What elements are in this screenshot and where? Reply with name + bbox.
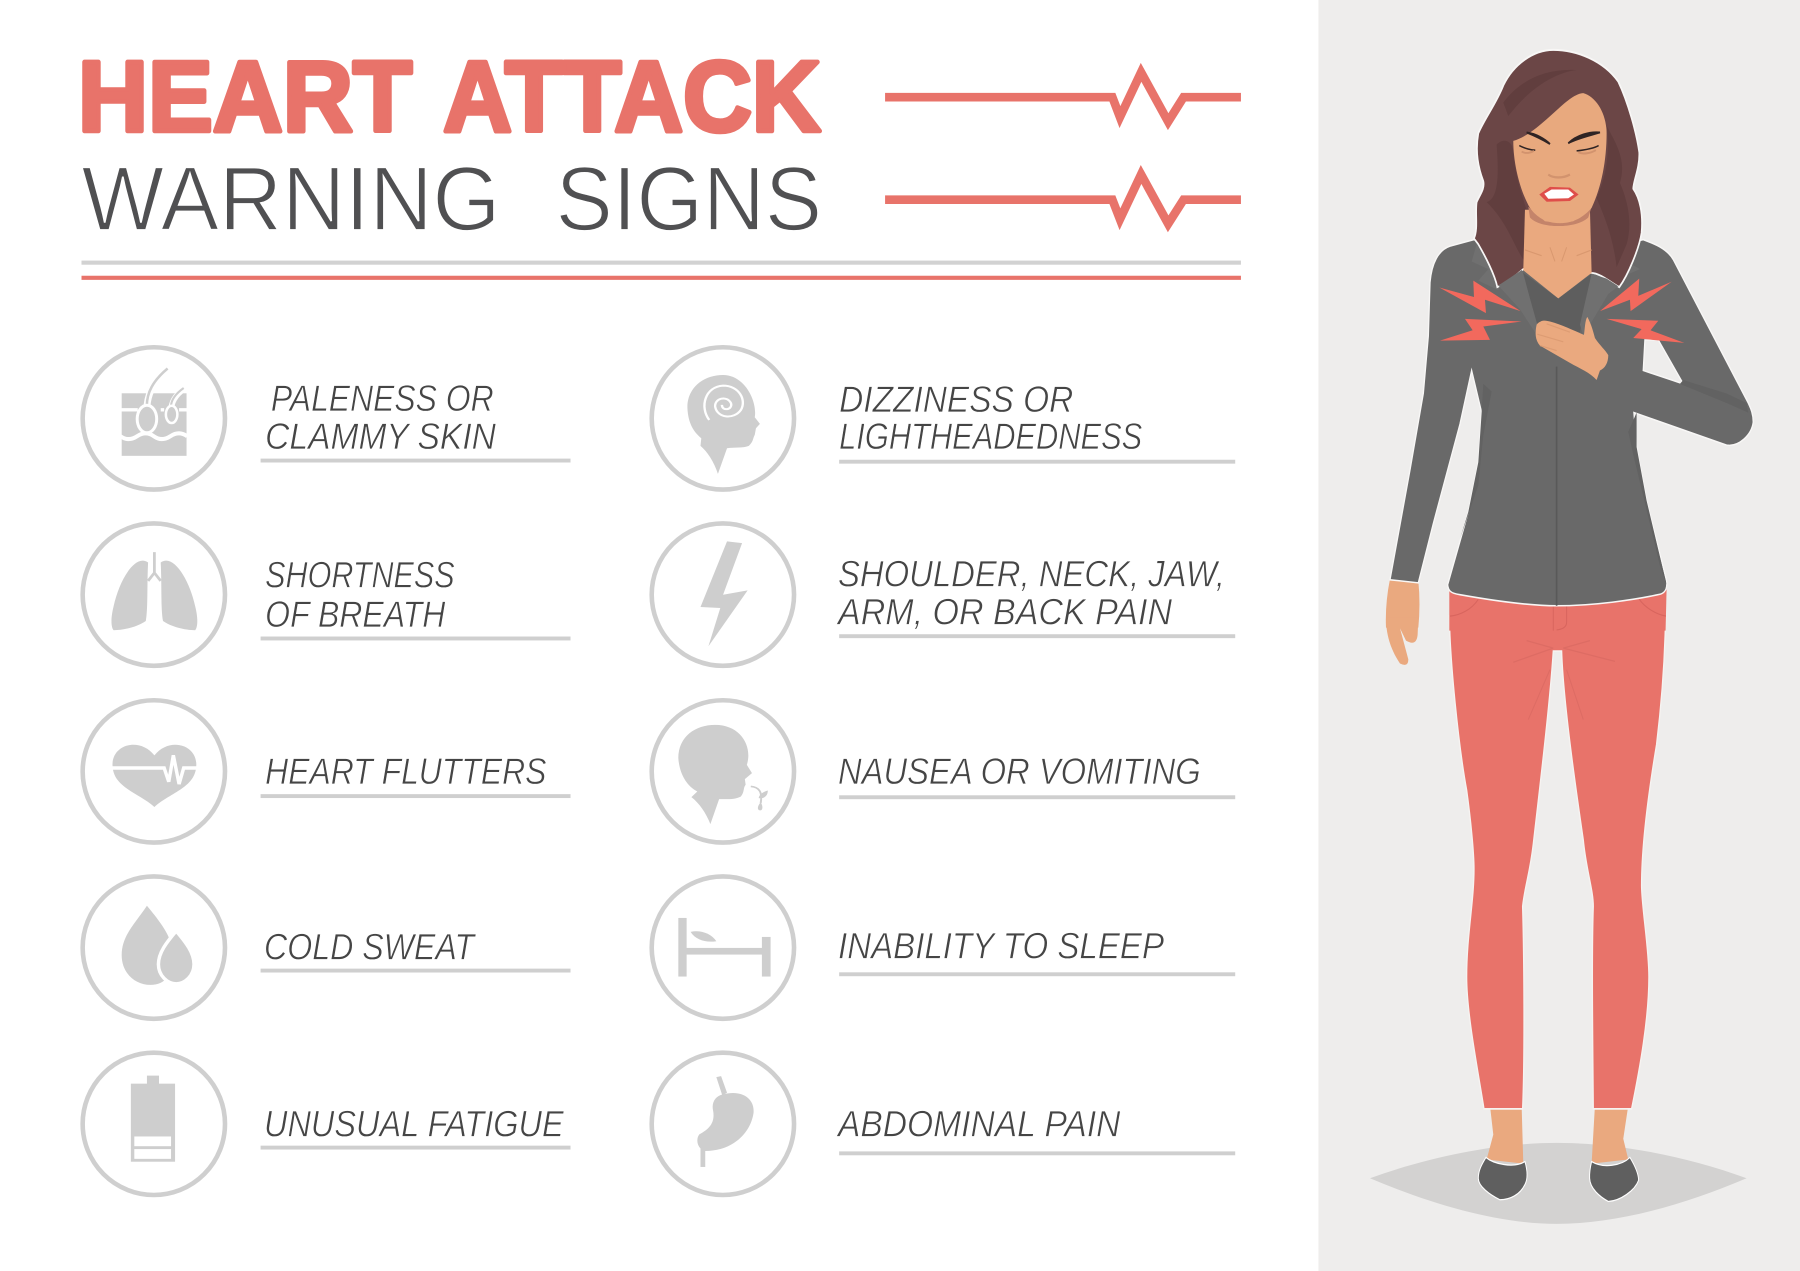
shirt bbox=[1523, 273, 1592, 332]
lapels bbox=[1498, 270, 1618, 336]
nose bbox=[1548, 175, 1570, 177]
hair bbox=[1474, 50, 1642, 287]
label: paleness or clammy skin: PALENESS OR bbox=[271, 378, 494, 419]
mouth bbox=[1539, 187, 1579, 202]
upper body bbox=[1390, 50, 1753, 631]
icon: drops bbox=[122, 906, 194, 985]
symptom: cold sweat bbox=[83, 876, 571, 1019]
title: warning signs: SIGNS bbox=[556, 149, 822, 250]
label: dizziness or: DIZZINESS OR bbox=[839, 379, 1073, 420]
label: shoulder, neck, jaw: SHOULDER, NECK, JAW, bbox=[838, 554, 1225, 595]
icon: battery bbox=[131, 1076, 175, 1162]
panel: figure background bbox=[1318, 0, 1800, 1271]
icon: lightning bolt bbox=[700, 541, 748, 646]
title: heart attack: ATTACK bbox=[443, 42, 821, 153]
label: cold sweat: COLD SWEAT bbox=[264, 927, 476, 968]
label: unusual fatigue: UNUSUAL FATIGUE bbox=[264, 1103, 564, 1144]
symptom: nausea or vomiting bbox=[652, 700, 1235, 843]
icon: heart with pulse bbox=[111, 745, 197, 807]
label: inability to sleep: INABILITY TO SLEEP bbox=[838, 926, 1164, 967]
hair strands bbox=[1487, 70, 1629, 267]
symptom: dizziness bbox=[652, 347, 1235, 490]
title: heart attack: HEART bbox=[78, 42, 412, 153]
symptom: unusual fatigue bbox=[83, 1053, 571, 1195]
lower body: legs and shoes bbox=[1449, 616, 1666, 1201]
title: heart attack bbox=[78, 42, 821, 153]
pants top bbox=[1449, 589, 1667, 631]
hand on chest bbox=[1536, 317, 1608, 380]
label: heart flutters: HEART FLUTTERS bbox=[265, 751, 547, 792]
symptom: abdominal pain bbox=[652, 1053, 1235, 1195]
jacket bbox=[1390, 240, 1753, 606]
label line 2: CLAMMY SKIN bbox=[265, 416, 496, 457]
face bbox=[1513, 93, 1607, 223]
icon: skin bbox=[121, 368, 187, 456]
icon: head vomiting bbox=[678, 725, 768, 824]
left hand bbox=[1386, 579, 1419, 665]
pain bolts bbox=[1439, 279, 1684, 343]
title: warning signs bbox=[82, 149, 822, 250]
icon: bed bbox=[678, 918, 771, 977]
symptom: inability to sleep bbox=[652, 876, 1235, 1019]
collar pieces behind hair bbox=[1472, 238, 1640, 290]
icon: head with spiral bbox=[687, 375, 760, 474]
icon: ecg line top bbox=[885, 72, 1241, 122]
symptom: shortness of breath bbox=[83, 523, 571, 666]
icon: stomach bbox=[697, 1076, 754, 1167]
neck and chest bbox=[1523, 210, 1592, 299]
symptom: paleness or clammy skin bbox=[83, 347, 571, 490]
ground shadow bbox=[1370, 1143, 1747, 1224]
label: arm, or back pain: ARM, OR BACK PAIN bbox=[836, 591, 1173, 632]
title: warning signs: WARNING bbox=[82, 149, 501, 250]
jacket shading bbox=[1460, 380, 1748, 585]
symptom: heart flutters bbox=[83, 700, 571, 843]
label: nausea or vomiting: NAUSEA OR VOMITING bbox=[838, 751, 1201, 792]
label: of breath: OF BREATH bbox=[265, 594, 446, 635]
icon: ecg line bottom bbox=[885, 174, 1241, 224]
illustration: woman clutching chest bbox=[1370, 50, 1753, 1224]
chin shadow bbox=[1528, 207, 1592, 226]
label: lightheadedness: LIGHTHEADEDNESS bbox=[839, 416, 1143, 457]
icon: lungs bbox=[111, 552, 197, 630]
label: abdominal pain: ABDOMINAL PAIN bbox=[836, 1103, 1121, 1144]
eyes and brows bbox=[1527, 132, 1600, 144]
symptom: shoulder, neck, jaw, arm or back pain bbox=[652, 523, 1235, 666]
label: shortness: SHORTNESS bbox=[265, 555, 455, 596]
